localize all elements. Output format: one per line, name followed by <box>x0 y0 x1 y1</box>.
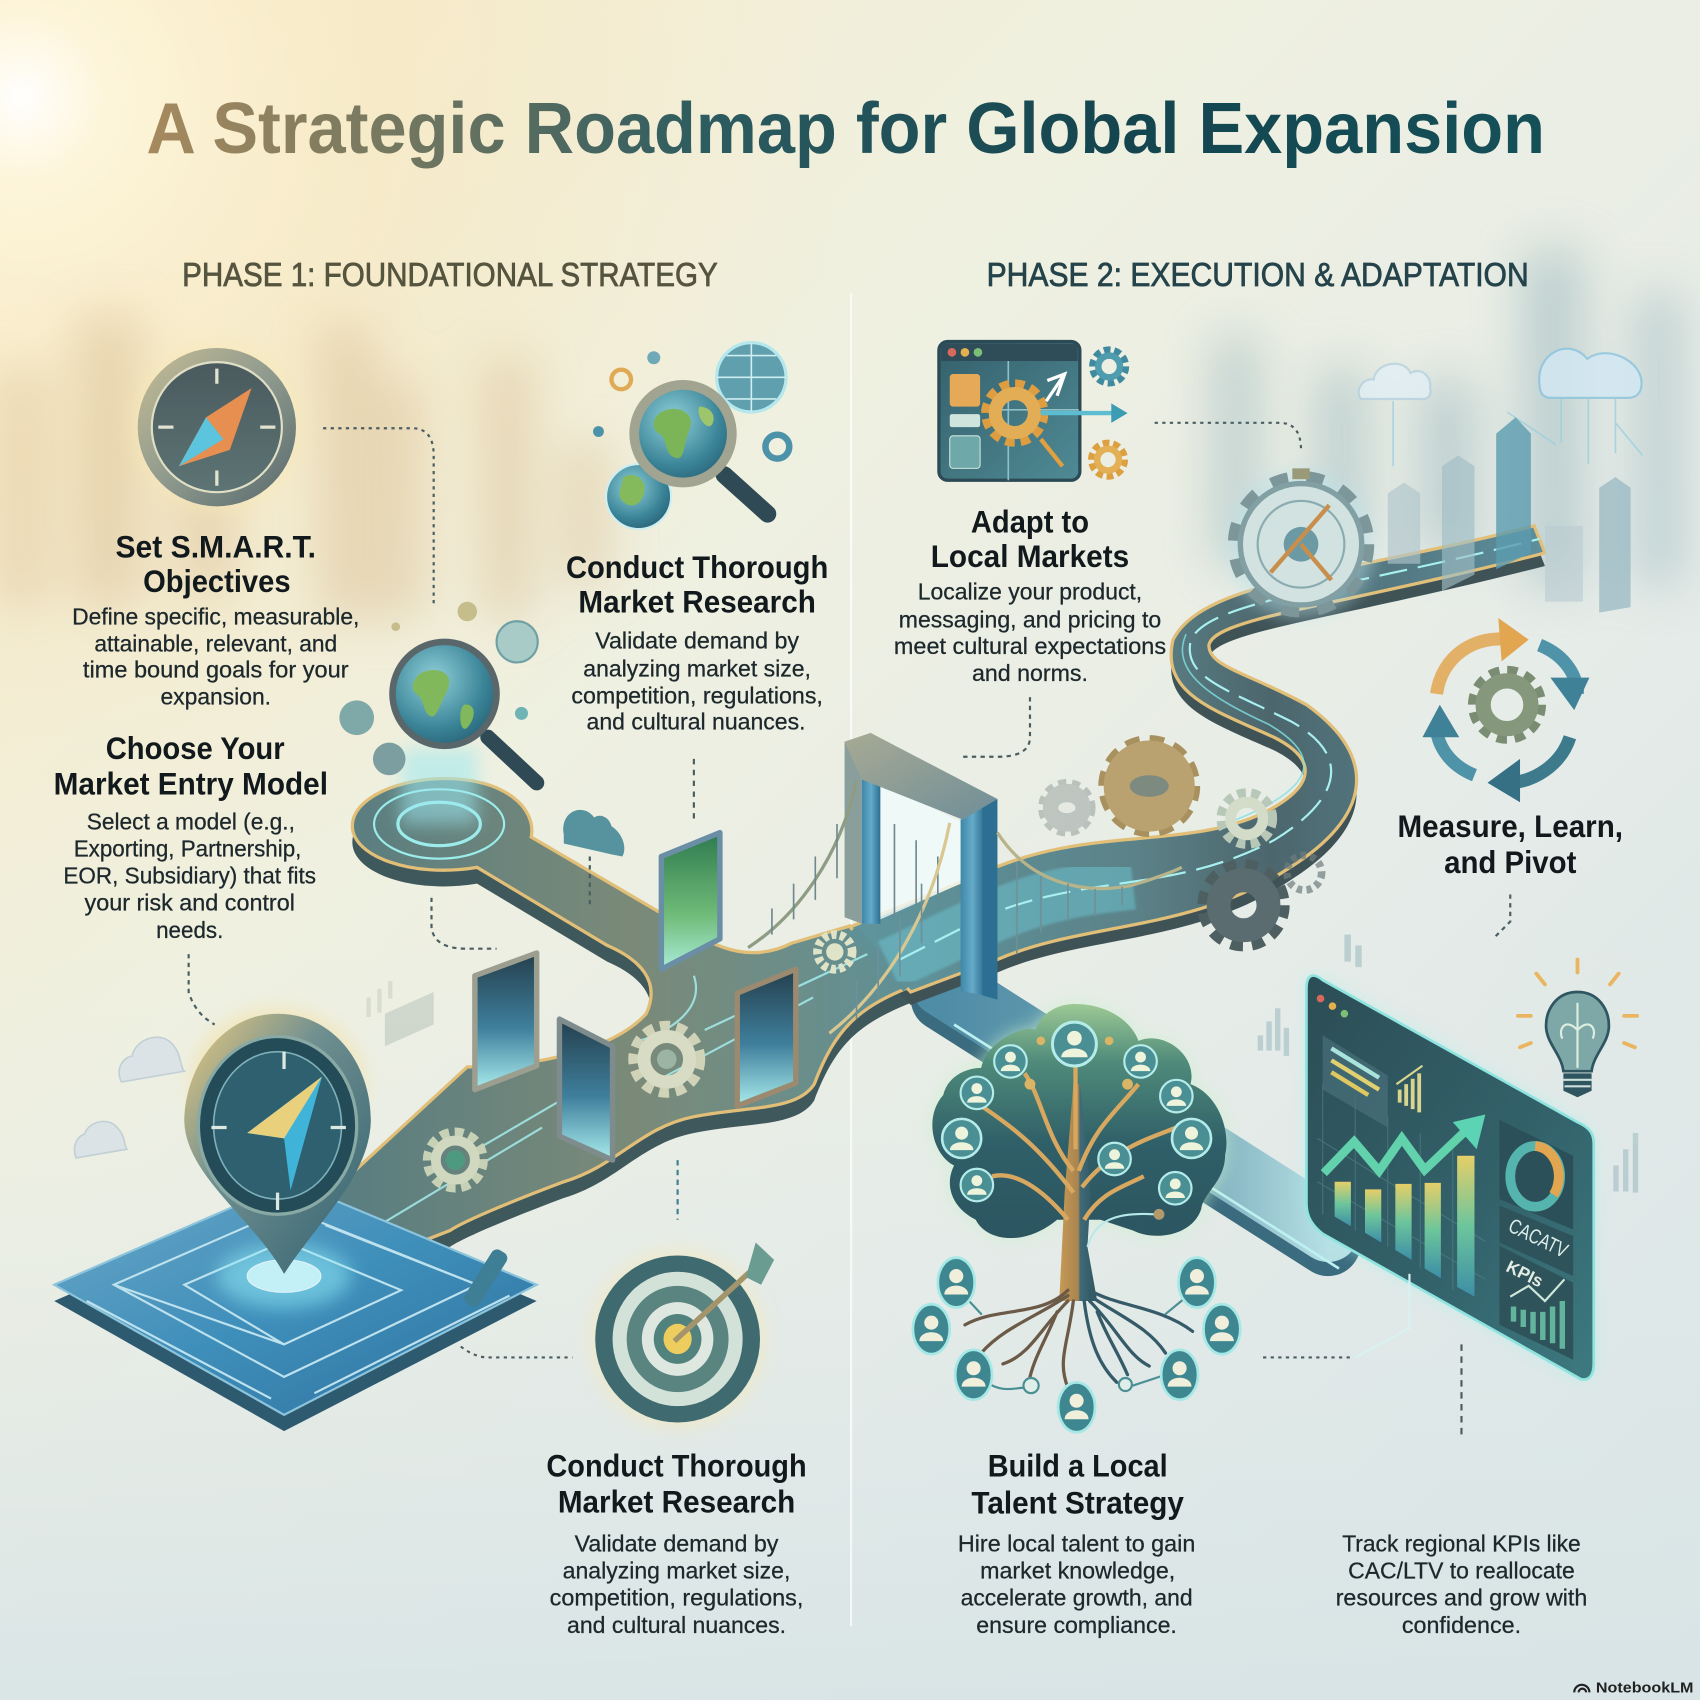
text: set SMART objectives: attainable, relevant, and <box>94 631 337 657</box>
text: set SMART objectives: Objectives <box>143 564 291 599</box>
text: adapt to local markets: meet cultural expectations <box>894 633 1166 659</box>
icon: clouds left <box>74 1037 184 1158</box>
text: choose market entry model: Choose Your <box>106 731 285 766</box>
text: build local talent strategy <box>958 1449 1195 1638</box>
text: adapt to local markets <box>894 504 1166 686</box>
hologram platform <box>374 748 504 859</box>
text: choose market entry model: Market Entry Model <box>54 767 328 802</box>
text: build local talent strategy: ensure compliance. <box>976 1612 1177 1638</box>
faint chart glyphs <box>1258 935 1638 1193</box>
text: choose market entry model: Select a model (e.g., <box>87 808 295 834</box>
icon: pin on map <box>54 1008 537 1431</box>
text: set SMART objectives <box>72 529 359 710</box>
text: adapt to local markets: Localize your product, <box>918 579 1142 605</box>
text: adapt to local markets: and norms. <box>972 660 1088 686</box>
text: measure learn pivot: and Pivot <box>1444 845 1577 880</box>
text: build local talent strategy: Hire local talent to gain <box>958 1530 1195 1556</box>
text: track regional KPIs <box>1336 1530 1587 1638</box>
text: set SMART objectives: expansion. <box>160 684 271 710</box>
icon: talent tree <box>913 1004 1240 1432</box>
suspension bridge <box>748 733 1182 1033</box>
text: conduct market research upper <box>566 550 828 735</box>
icon: KPI dashboard: KPIs <box>1503 1256 1546 1291</box>
text: conduct market research upper: analyzing market size, <box>583 656 811 682</box>
text: track regional KPIs: Track regional KPIs like <box>1342 1530 1581 1556</box>
text: build local talent strategy: Build a Local <box>988 1449 1168 1484</box>
icon: localization window <box>939 342 1128 480</box>
blurred city skyline <box>0 249 1680 618</box>
text: measure learn pivot: Measure, Learn, <box>1398 809 1623 844</box>
icon: KPI dashboard <box>1306 976 1594 1379</box>
icon: measure learn pivot cycle <box>1422 618 1589 802</box>
heading: phase 2: PHASE 2: EXECUTION & ADAPTATION <box>987 257 1529 294</box>
text: track regional KPIs: confidence. <box>1402 1612 1521 1638</box>
text: track regional KPIs: CAC/LTV to reallocate <box>1348 1558 1575 1584</box>
text: set SMART objectives: Set S.M.A.R.T. <box>115 529 316 564</box>
icon: lightbulb <box>1518 960 1637 1097</box>
text: conduct market research lower: Market Research <box>558 1484 795 1519</box>
connectors <box>189 423 1510 1437</box>
text: set SMART objectives: time bound goals for your <box>83 657 349 683</box>
text: build local talent strategy: market knowledge, <box>980 1558 1175 1584</box>
roadmap path <box>325 526 1545 1296</box>
notebooklm watermark: NotebookLM <box>1596 1679 1693 1696</box>
text: conduct market research lower: Validate demand by <box>575 1530 779 1556</box>
divider <box>850 293 852 1626</box>
text: conduct market research lower <box>546 1449 807 1638</box>
text: conduct market research lower: competition, regulations, <box>550 1585 803 1611</box>
text: set SMART objectives: Define specific, measurable, <box>72 603 359 629</box>
text: measure learn pivot <box>1398 809 1623 880</box>
text: adapt to local markets: messaging, and pricing to <box>899 607 1161 633</box>
icon: compass objectives <box>132 343 301 512</box>
icon: gauge gear <box>1227 468 1375 618</box>
text: conduct market research lower: and cultural nuances. <box>567 1612 786 1638</box>
icon: faint data panel <box>369 981 434 1046</box>
doors <box>475 833 796 1160</box>
text: adapt to local markets: Local Markets <box>931 539 1129 574</box>
icon: KPI dashboard: CACATV <box>1505 1214 1572 1263</box>
text: conduct market research upper: Market Research <box>578 585 816 620</box>
icon: target <box>591 1242 774 1428</box>
text: choose market entry model: EOR, Subsidiary) that fits <box>63 863 316 889</box>
text: build local talent strategy: Talent Strategy <box>971 1486 1184 1521</box>
text: conduct market research upper: competition, regulations, <box>571 683 823 709</box>
text: choose market entry model <box>54 731 328 943</box>
text: conduct market research upper: and cultural nuances. <box>587 709 806 735</box>
icon: cityscape with clouds <box>1359 349 1643 613</box>
text: conduct market research upper: Conduct Thorough <box>566 550 828 585</box>
text: choose market entry model: needs. <box>156 917 223 943</box>
text: build local talent strategy: accelerate growth, and <box>961 1585 1193 1611</box>
road gears <box>428 740 1322 1187</box>
text: conduct market research lower: analyzing market size, <box>563 1558 790 1584</box>
text: adapt to local markets: Adapt to <box>971 504 1089 539</box>
heading: phase 1: PHASE 1: FOUNDATIONAL STRATEGY <box>182 257 718 294</box>
title: A Strategic Roadmap for Global Expansion <box>146 88 1545 169</box>
icon: magnifier market research <box>593 343 789 529</box>
text: choose market entry model: your risk and control <box>85 890 295 916</box>
text: conduct market research lower: Conduct Thorough <box>546 1449 807 1484</box>
icon: cloud <box>563 810 624 857</box>
icon: magnifier with globe <box>339 602 538 783</box>
text: track regional KPIs: resources and grow with <box>1336 1585 1587 1611</box>
text: conduct market research upper: Validate demand by <box>595 627 800 653</box>
text: choose market entry model: Exporting, Partnership, <box>74 836 301 862</box>
